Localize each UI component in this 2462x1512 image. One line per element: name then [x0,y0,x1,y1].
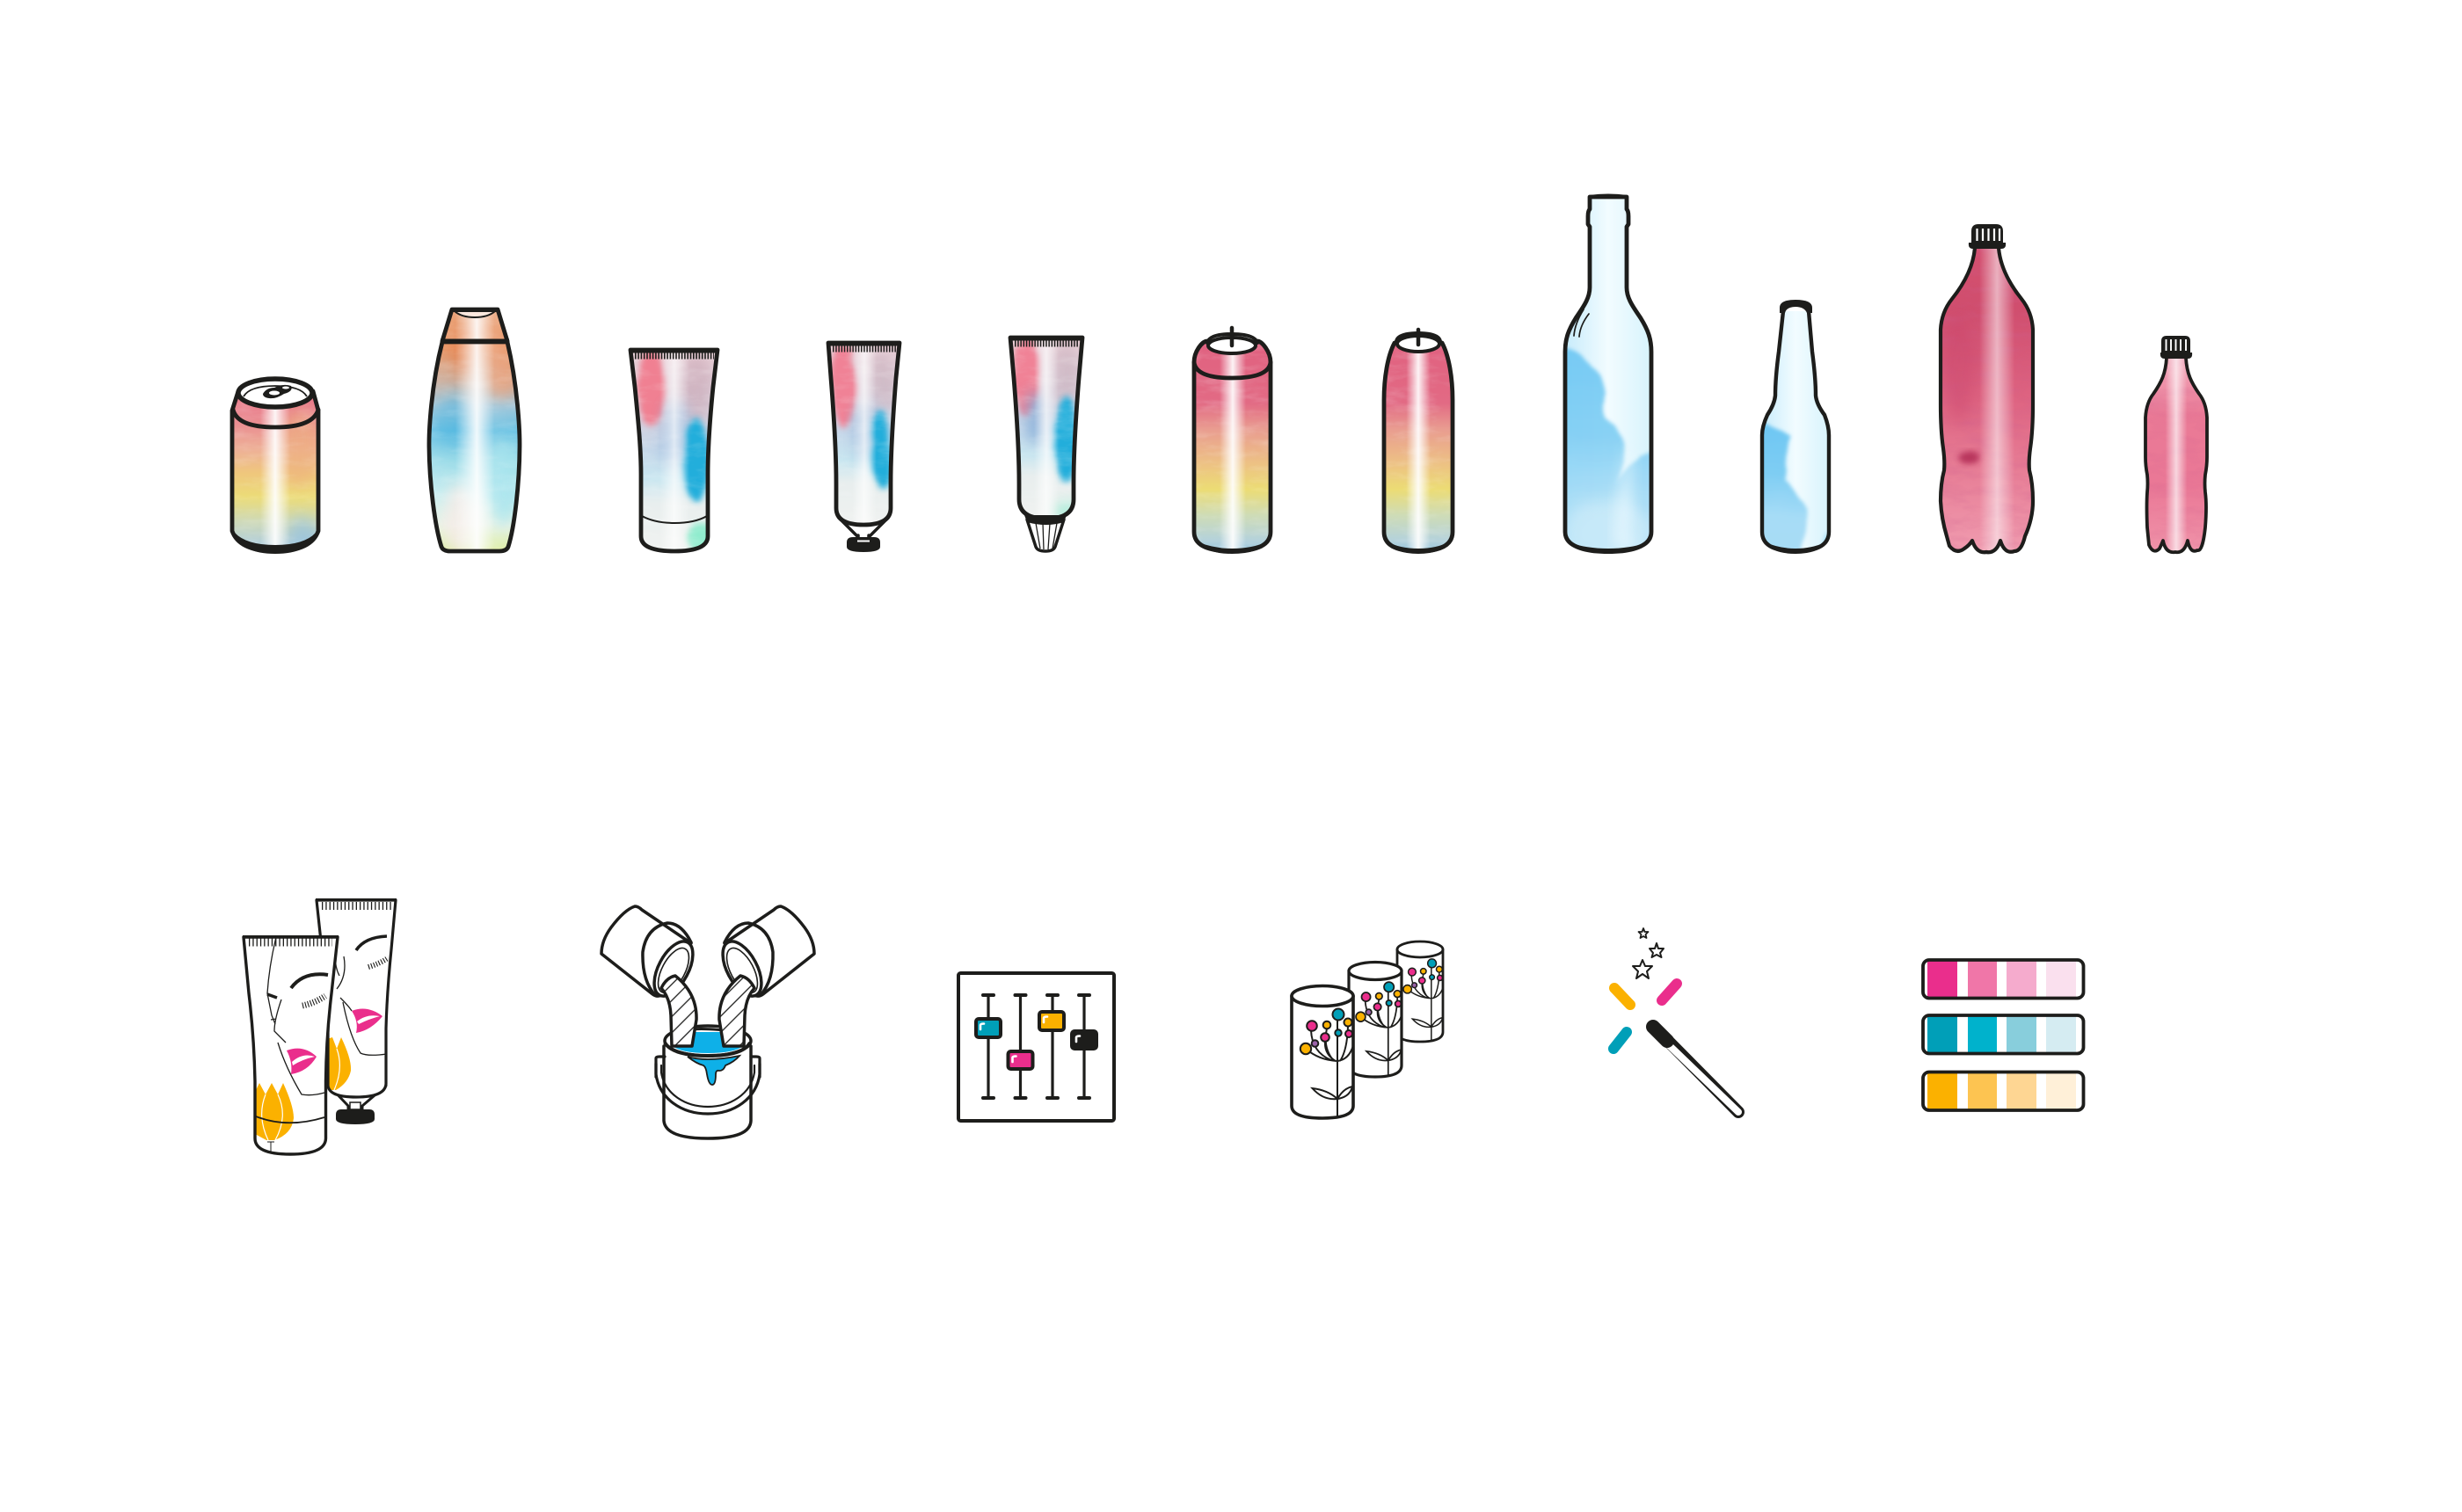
front tube [237,932,343,1157]
swatch row: teal [1923,1015,2084,1053]
packaging row [229,193,2211,563]
slider: amber [1039,1012,1064,1030]
right pour [715,906,814,1046]
back tube [312,897,400,1124]
back cylinder [1397,941,1444,1042]
icon: decorated cylinders [1292,941,1444,1118]
icon: colour swatches [1923,960,2084,1110]
small plastic bottle [2142,336,2211,556]
icon: branded tubes [237,897,400,1157]
aerosol can without shoulder [1380,330,1456,554]
left pour [601,906,701,1046]
icon: paint pots pouring into a bucket [601,906,814,1138]
cream tube with flat cap [827,341,902,552]
swatch row: magenta [1923,960,2084,999]
bucket back [664,1026,751,1138]
icon row [237,897,2084,1157]
slider: teal [976,1019,1001,1037]
aerosol can with shoulder [1191,328,1274,554]
icon: magic wand [1613,928,1738,1112]
infographic canvas [230,193,2209,1156]
paint surface [673,1032,743,1053]
large plastic bottle [1938,224,2036,554]
shampoo bottle [426,308,524,554]
front cylinder [1292,986,1354,1118]
bucket rim and drip [656,1043,760,1114]
swatch row: amber [1923,1072,2084,1110]
slider: magenta [1008,1051,1032,1069]
wine bottle [1562,193,1657,563]
drinks can [229,379,322,554]
beer bottle [1759,300,1832,559]
slider: black [1072,1031,1096,1049]
middle cylinder [1349,962,1402,1077]
icon: mixer sliders [958,973,1114,1121]
cream tube with nozzle [1008,336,1085,551]
cream tube with screw base [628,348,721,554]
